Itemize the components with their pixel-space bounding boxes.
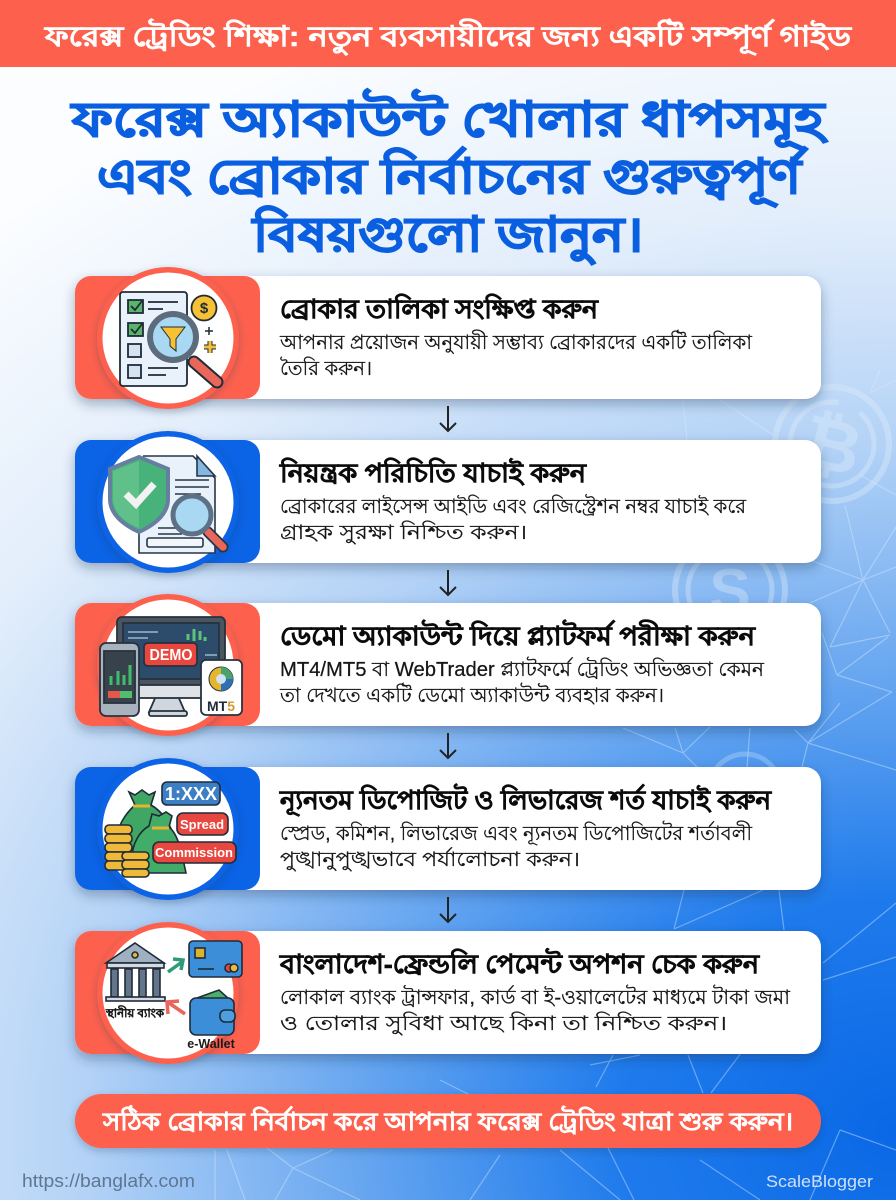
- arrow 3: [440, 733, 456, 758]
- header text: ফরেক্স ট্রেডিং শিক্ষা: নতুন ব্যবসায়ীদের জন্য একটি সম্পূর্ণ গাইড: [44, 18, 853, 56]
- step 4 body: স্প্রেড, কমিশন, লিভারেজ এবং ন্যূনতম ডিপোজিটের শর্তাবলী: [280, 821, 752, 845]
- step 5 body: ও তোলার সুবিধা আছে কিনা তা নিশ্চিত করুন।: [280, 1012, 727, 1035]
- title: ফরেক্স অ্যাকাউন্ট খোলার ধাপসমূহ: [70, 88, 828, 151]
- footer url: https://banglafx.com: [22, 1171, 195, 1191]
- step 5 body: লোকাল ব্যাংক ট্রান্সফার, কার্ড বা ই-ওয়ালেটের মাধ্যমে টাকা জমা: [280, 985, 791, 1009]
- header bar: [0, 0, 896, 67]
- arrow: wallet to bank: [167, 1001, 185, 1014]
- coin: faint: [709, 754, 781, 826]
- footer brand: ScaleBlogger: [766, 1172, 873, 1191]
- step 1 body: তৈরি করুন।: [280, 357, 372, 380]
- icon: money bags and coins: [105, 782, 236, 877]
- step 5 body: [280, 985, 791, 1035]
- step 1 body: আপনার প্রয়োজন অনুযায়ী সম্ভাব্য ব্রোকারদের একটি তালিকা: [279, 330, 753, 354]
- ratio label: 1:XXX: [165, 784, 217, 804]
- title: [70, 88, 828, 266]
- step 3 heading: ডেমো অ্যাকাউন্ট দিয়ে প্ল্যাটফর্ম পরীক্ষা করুন: [280, 619, 757, 651]
- icon: checklist with filter magnifier: [120, 292, 217, 386]
- icon: bank, card, wallet: [106, 941, 242, 1035]
- title: বিষয়গুলো জানুন।: [251, 206, 643, 266]
- step 2 heading: নিয়ন্ত্রক পরিচিতি যাচাই করুন: [279, 457, 588, 488]
- mt5 label: MT5: [207, 698, 235, 714]
- step 4 body: [280, 821, 752, 871]
- step 4 heading: ন্যূনতম ডিপোজিট ও লিভারেজ শর্ত যাচাই করুন: [279, 783, 772, 817]
- step 2 body: গ্রাহক সুরক্ষা নিশ্চিত করুন।: [280, 521, 527, 544]
- step 3 body: [279, 657, 765, 707]
- step 3 body: তা দেখতে একটি ডেমো অ্যাকাউন্ট ব্যবহার করুন।: [279, 683, 664, 707]
- arrow 4: [440, 897, 456, 922]
- icon: shield and licence document: [110, 456, 223, 553]
- step 1 heading: ব্রোকার তালিকা সংক্ষিপ্ত করুন: [280, 293, 600, 324]
- coin: bitcoin: ₿: [793, 400, 870, 492]
- step 2 body: ব্রোকারের লাইসেন্স আইডি এবং রেজিস্ট্রেশন নম্বর যাচাই করে: [280, 494, 747, 518]
- arrow 1: [440, 406, 456, 431]
- step 3 card: [75, 594, 821, 736]
- commission label: Commission: [155, 845, 233, 860]
- step 5 heading: বাংলাদেশ-ফ্রেন্ডলি পেমেন্ট অপশন চেক করুন: [279, 947, 761, 979]
- step 2 body: [280, 494, 747, 544]
- step 4 body: পুঙ্খানুপুঙ্খভাবে পর্যালোচনা করুন।: [280, 847, 580, 871]
- icon: monitor, phone, DEMO badge, MT5: [100, 617, 242, 716]
- coin: dollar: [675, 535, 785, 645]
- spread label: Spread: [180, 817, 224, 832]
- arrow 2: [440, 570, 456, 595]
- e-wallet label: e-Wallet: [187, 1037, 236, 1051]
- step 5 card: [75, 922, 821, 1064]
- step 2 card: [75, 431, 821, 573]
- step 4 card: [75, 758, 821, 900]
- coin: bitcoin: [775, 387, 889, 501]
- title: এবং ব্রোকার নির্বাচনের গুরুত্বপূর্ণ: [97, 146, 808, 208]
- step 1 card: $: [200, 300, 209, 317]
- coin: dollar: S: [709, 557, 751, 626]
- arrow: bank to card: [168, 959, 183, 972]
- bank label: স্থানীয় ব্যাংক: [105, 1005, 165, 1020]
- call to action text: সঠিক ব্রোকার নির্বাচন করে আপনার ফরেক্স ট্রেডিং যাত্রা শুরু করুন।: [102, 1105, 793, 1136]
- step 3 body: MT4/MT5 বা WebTrader প্ল্যাটফর্মে ট্রেডিং অভিজ্ঞতা কেমন: [280, 657, 765, 681]
- call to action pill: [75, 1094, 821, 1148]
- step 1 card: [75, 267, 821, 409]
- step 1 body: [279, 330, 753, 380]
- demo label: DEMO: [150, 647, 192, 664]
